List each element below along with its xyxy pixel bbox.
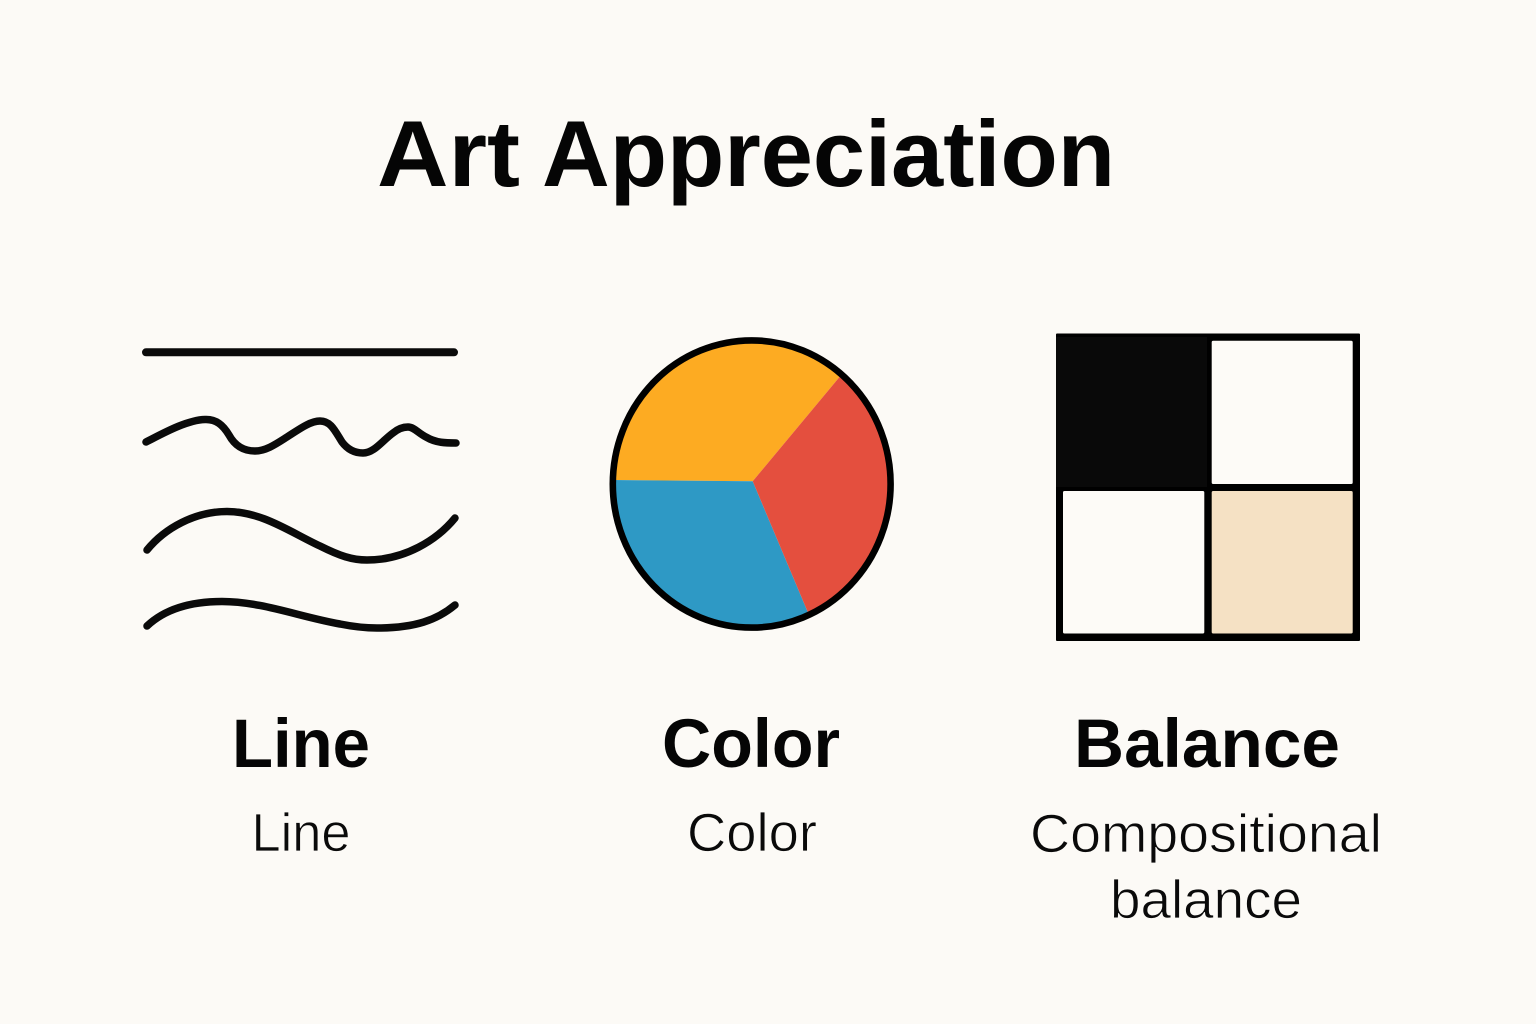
heading: Color: Color	[662, 705, 840, 782]
caption: Line: Line	[252, 803, 350, 863]
beige cell	[1212, 491, 1353, 634]
caption: Compositional balance: balance	[1110, 870, 1302, 930]
blue segment	[613, 480, 809, 628]
grid frame	[1056, 334, 1360, 641]
title: Appreciation	[542, 101, 1115, 206]
white cell top right	[1212, 341, 1353, 484]
heading: Line: Line	[232, 705, 370, 782]
caption: Compositional balance	[1030, 804, 1382, 930]
wave line	[147, 512, 455, 560]
heading: Balance: Balance	[1074, 705, 1340, 782]
caption: Compositional balance: Compositional	[1030, 804, 1382, 864]
white cell bottom left	[1063, 491, 1204, 634]
orange segment	[613, 340, 842, 481]
squiggly line	[146, 419, 456, 453]
icon: line samples	[146, 352, 456, 628]
title: Art	[377, 101, 520, 206]
gentle wave line	[147, 602, 455, 628]
straight line	[146, 348, 454, 356]
red segment	[753, 374, 891, 615]
black cell	[1056, 337, 1207, 487]
wheel outline	[613, 340, 891, 628]
caption: Color: Color	[687, 803, 817, 863]
icon: balance grid	[1056, 334, 1360, 641]
icon: color wheel	[613, 340, 891, 628]
